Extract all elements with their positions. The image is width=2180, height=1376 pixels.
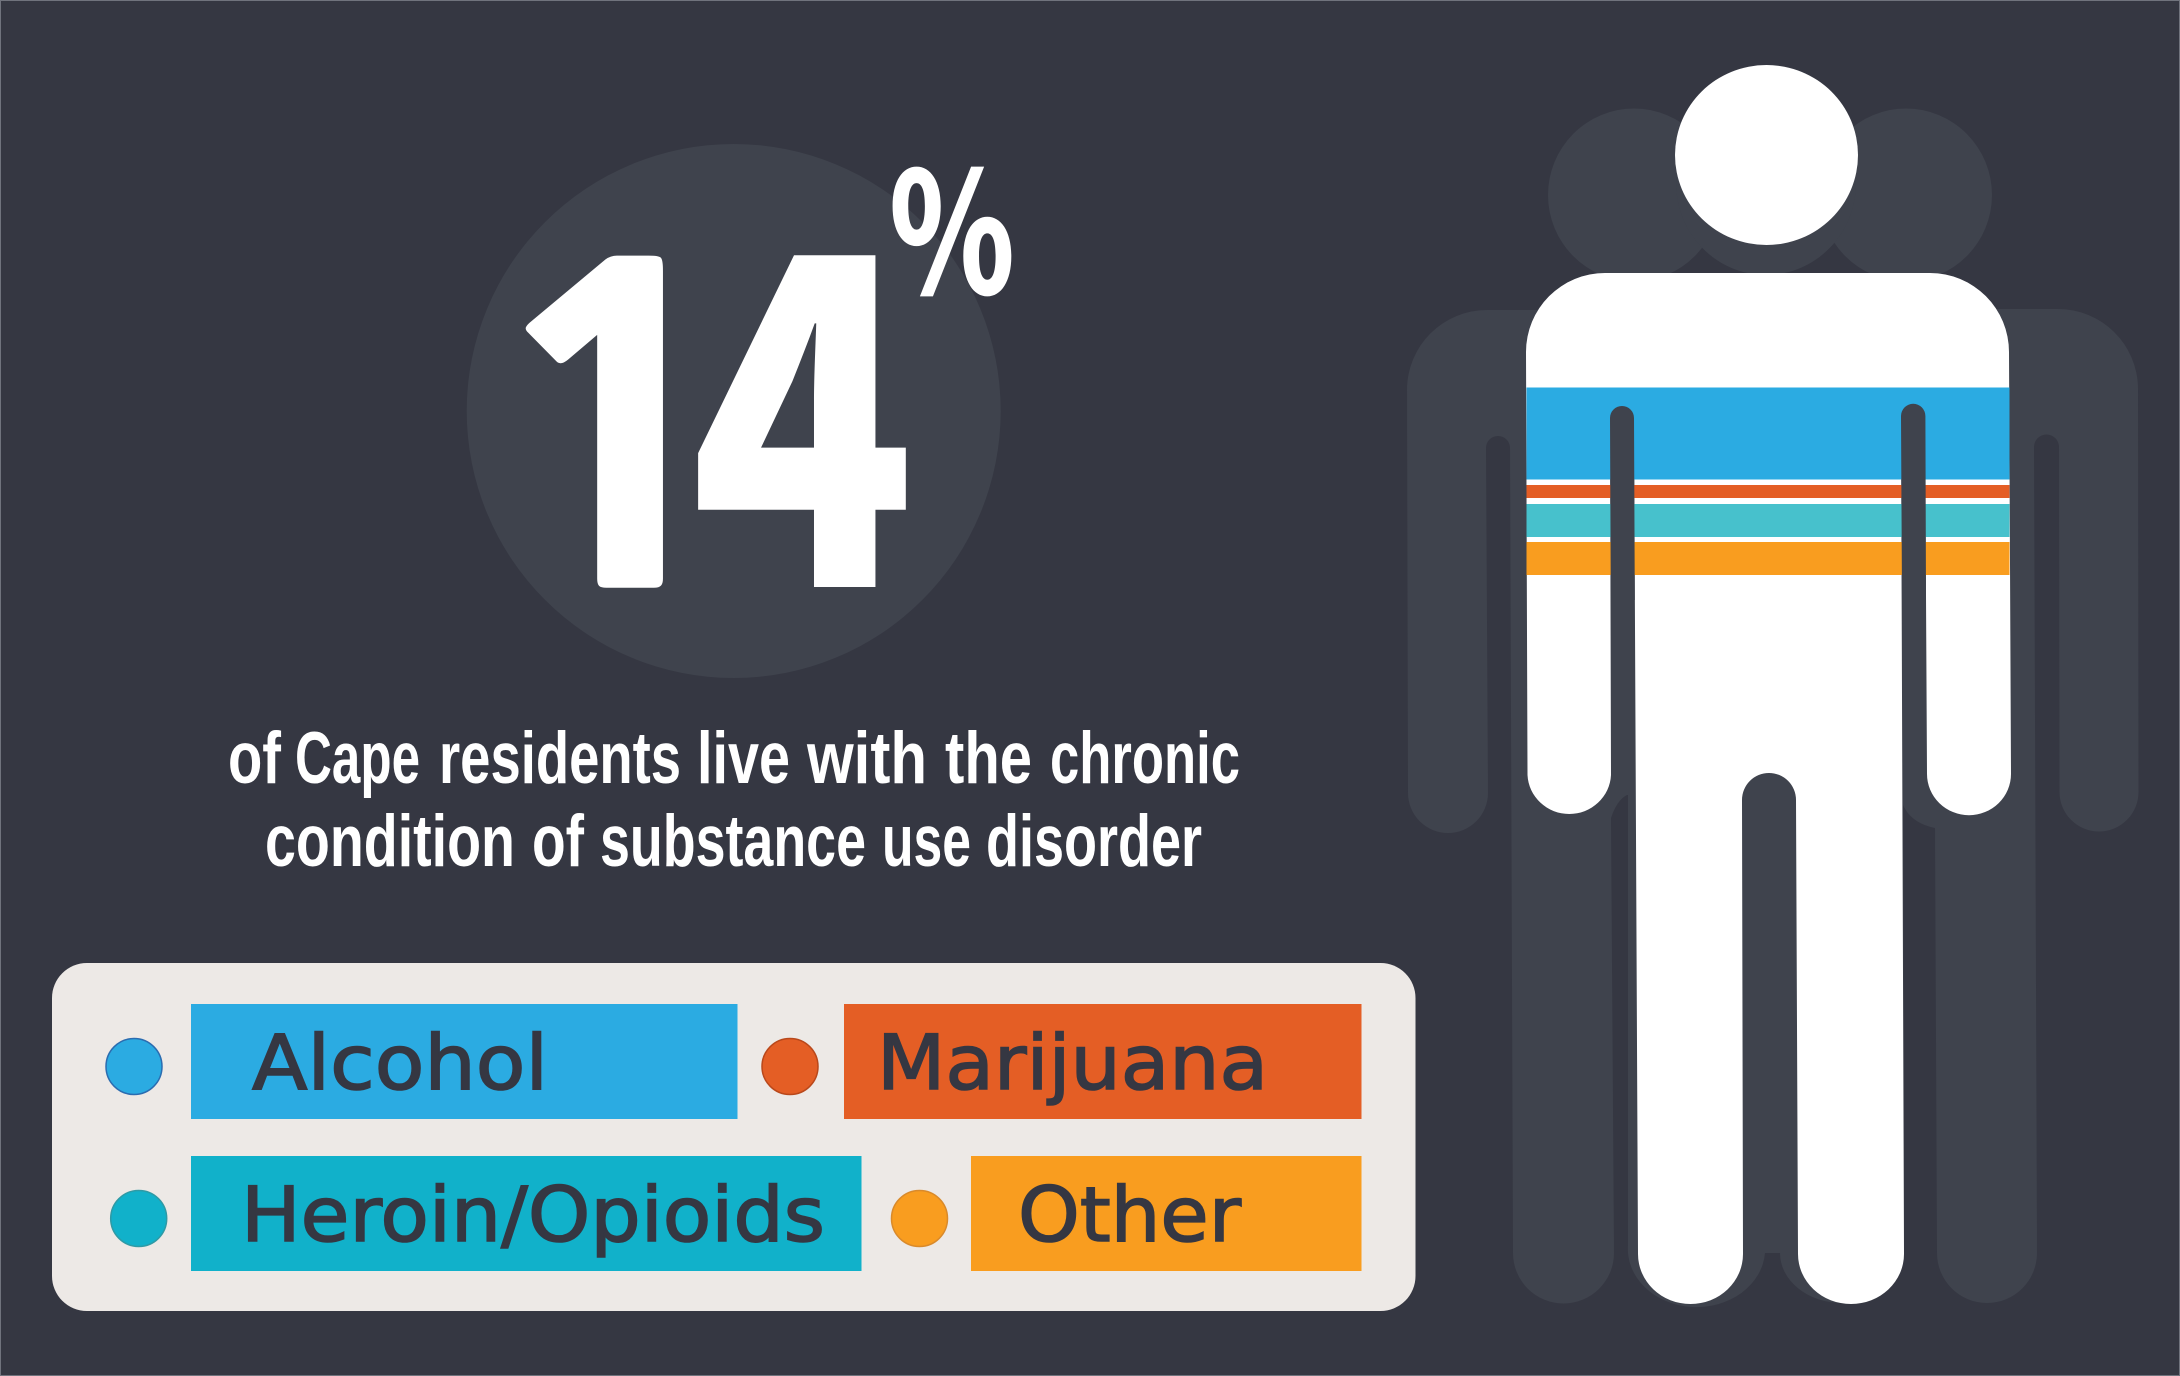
background figure: left [1407, 108, 1720, 1304]
number 14 [475, 57, 915, 719]
percent sign: % [889, 99, 1015, 342]
description text: Cape [295, 718, 420, 799]
legend item: other: Other [1018, 1170, 1242, 1259]
description text: of [228, 718, 282, 799]
legend item: heroin and opioids [111, 1156, 861, 1271]
legend background [52, 963, 1416, 1311]
legend item: marijuana: Marijuana [877, 1018, 1268, 1107]
description text: live [697, 718, 790, 799]
description text: disorder [986, 801, 1202, 882]
description text: chronic [1050, 718, 1240, 799]
legend item: other [892, 1156, 1362, 1271]
description text: of [532, 801, 585, 882]
legend item: alcohol [106, 1004, 738, 1119]
description text: with [806, 718, 927, 799]
number 14: 1 [475, 221, 765, 649]
panel: big statistic [467, 57, 1015, 719]
description text [228, 718, 1240, 882]
statistic background circle [467, 144, 1001, 678]
legend item: marijuana [762, 1004, 1362, 1119]
description text: the [945, 718, 1032, 799]
background figure: right [1820, 108, 2138, 1303]
description text: substance [600, 801, 866, 882]
description text: condition [265, 801, 515, 882]
foreground figure: body [1526, 273, 2011, 1304]
number 14: 4 [690, 57, 915, 719]
description text: residents [439, 718, 681, 799]
description text: use [882, 801, 971, 882]
legend item: alcohol: Alcohol [252, 1018, 548, 1107]
panel: legend [52, 963, 1416, 1311]
arm gaps over stripes [1610, 404, 1926, 600]
legend item: heroin and opioids: Heroin/Opioids [241, 1170, 825, 1259]
background figure: centre [1628, 91, 1904, 1307]
people group figure [1407, 65, 2138, 1307]
substance use stripes [1526, 388, 2010, 575]
foreground figure: head [1675, 65, 1858, 245]
